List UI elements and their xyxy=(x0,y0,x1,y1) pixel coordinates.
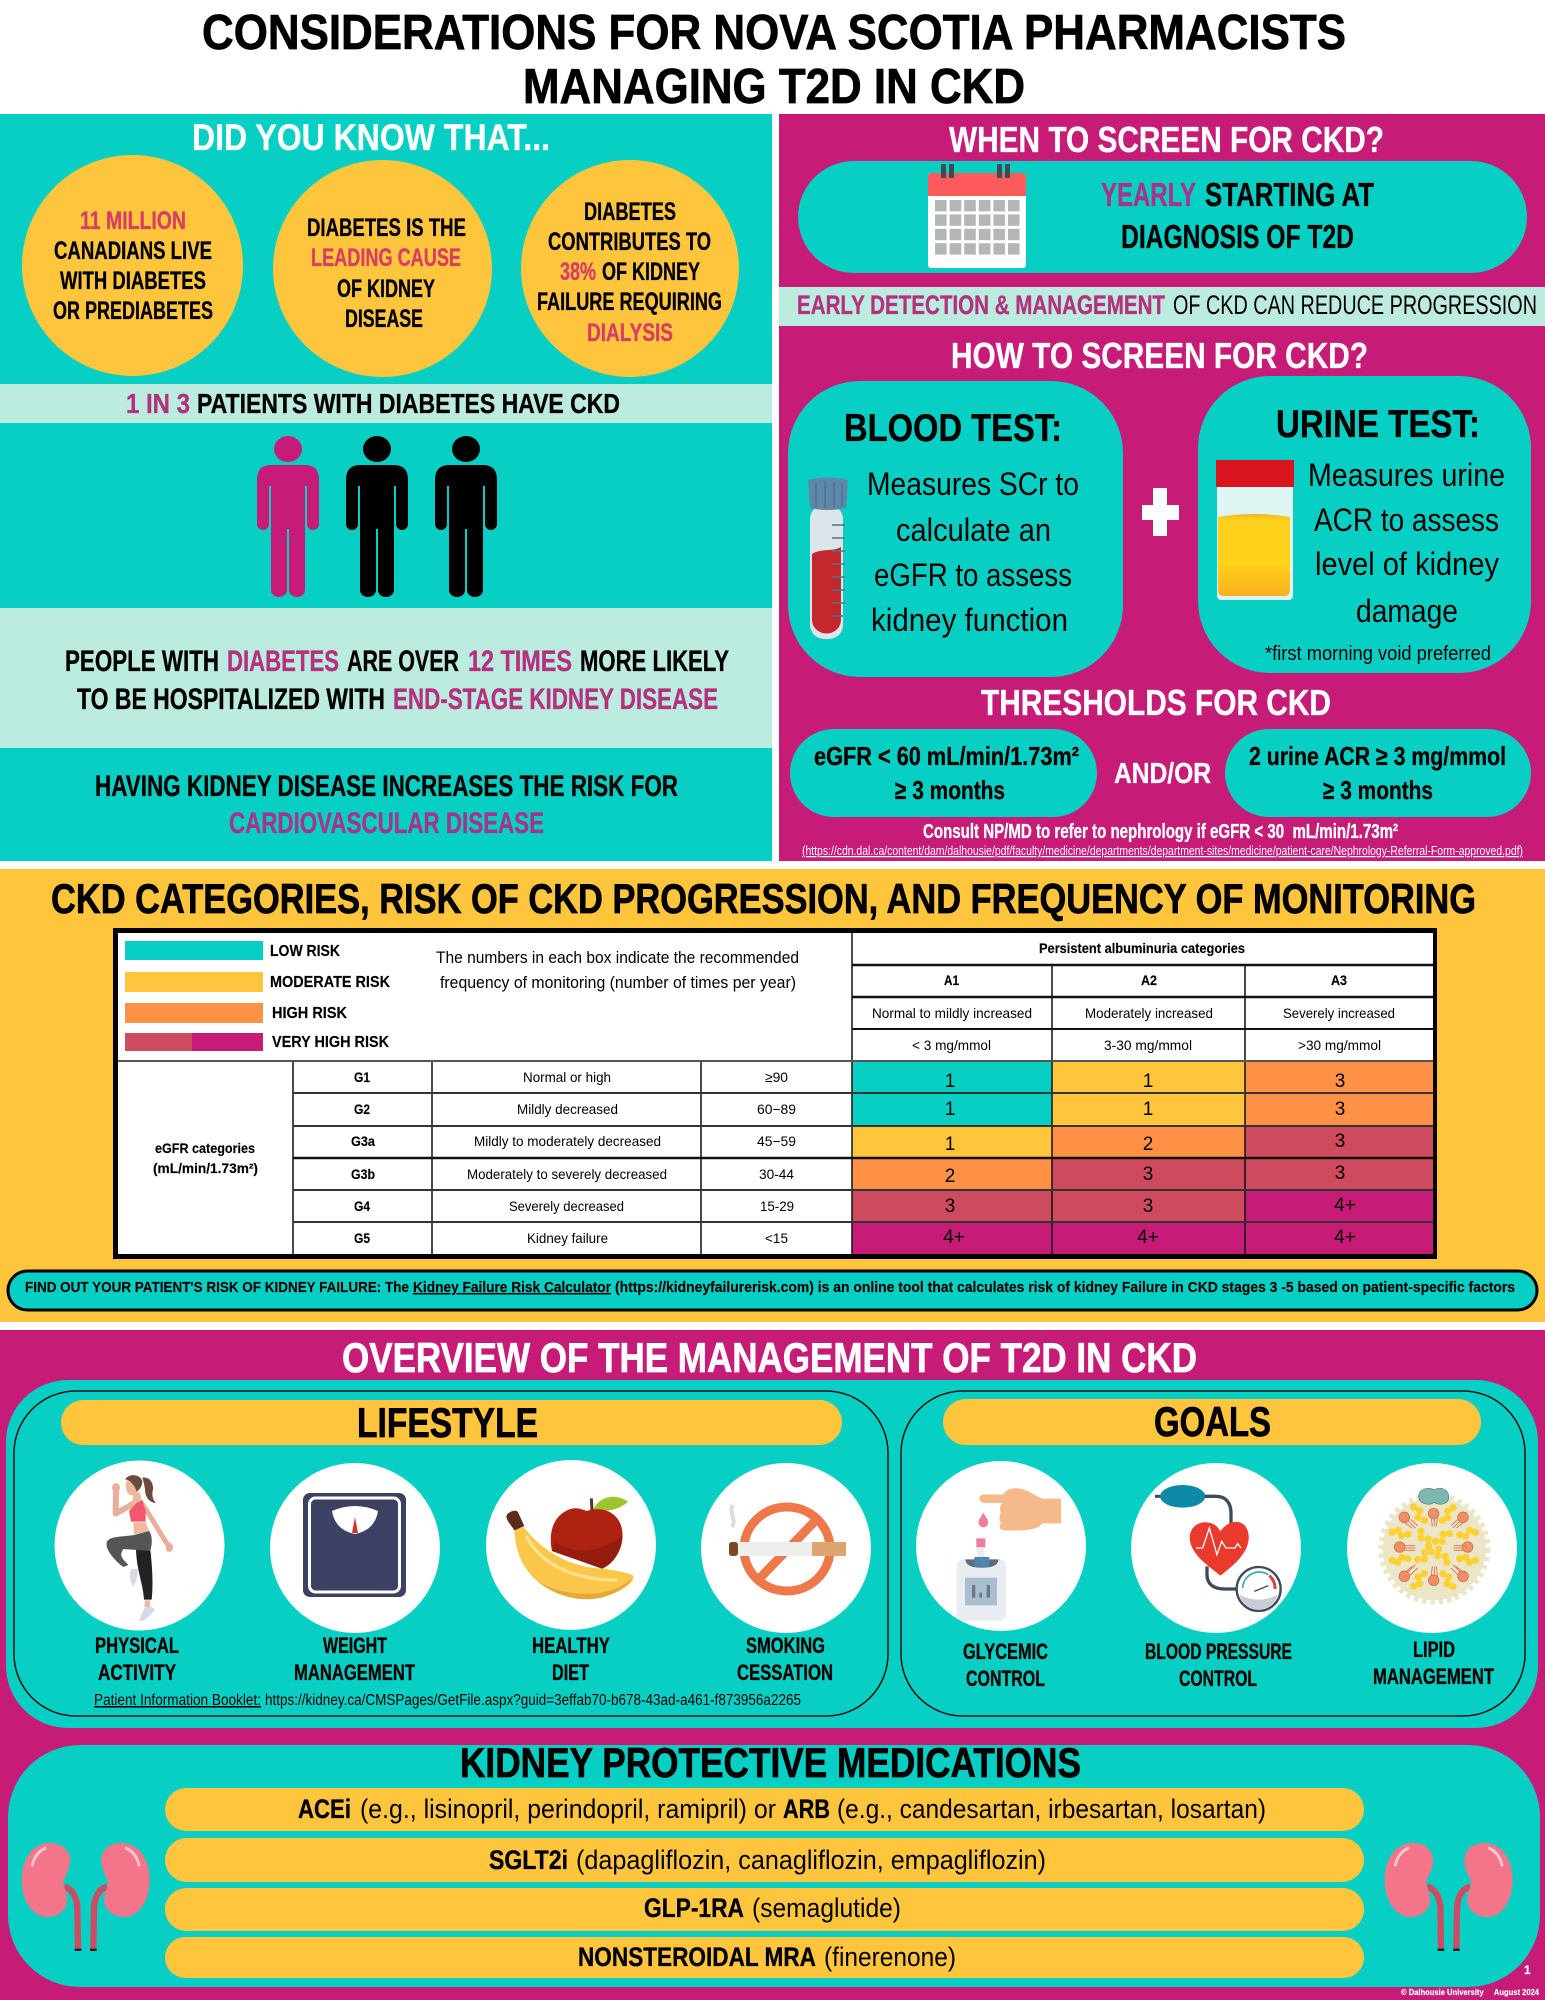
goals labels: BLOOD PRESSURE xyxy=(1145,1639,1292,1664)
icon: black person xyxy=(346,436,408,597)
pill: ACR threshold xyxy=(1225,729,1531,817)
text: cardiovascular risk: CARDIOVASCULAR DISEASE xyxy=(229,807,544,840)
monitoring frequency numbers: 4+ xyxy=(943,1227,965,1248)
fact circle: leading cause: DISEASE xyxy=(345,305,423,333)
eGFR category labels: Kidney failure xyxy=(527,1230,608,1246)
table grid xyxy=(118,933,1433,1254)
pill: eGFR threshold: ≥ 3 months xyxy=(895,775,1005,805)
icon: blood tube xyxy=(808,478,848,639)
eGFR category labels: 15-29 xyxy=(760,1198,794,1214)
card: urine test: URINE TEST: xyxy=(1276,403,1480,446)
lifestyle labels: DIET xyxy=(552,1660,589,1685)
text: cardiovascular risk xyxy=(95,770,678,840)
albuminuria headers: Moderately increased xyxy=(1085,1005,1213,1021)
card: urine test xyxy=(1198,376,1531,673)
monitoring frequency numbers: 3 xyxy=(1335,1163,1345,1184)
fact circle: 11 million: WITH DIABETES xyxy=(60,267,206,295)
band: hospitalization fact: DIABETES xyxy=(227,645,339,678)
text: cardiovascular risk: HAVING KIDNEY DISEASE INCREASES THE RISK FOR xyxy=(95,770,678,803)
band: hospitalization fact xyxy=(0,608,772,748)
callout: kidney failure risk calculator: (https://kidneyfailurerisk.com) is an online tool that calculates risk of kidney Failure in CKD stages 3 -5 based on patient-specific factors xyxy=(615,1280,1515,1296)
pill: ACEi or ARB xyxy=(165,1788,1364,1831)
pill: nonsteroidal MRA: (finerenone) xyxy=(824,1942,956,1972)
band: hospitalization fact: PEOPLE WITH xyxy=(65,645,219,678)
monitoring frequency numbers: 1 xyxy=(1143,1099,1153,1120)
title xyxy=(202,6,1346,114)
fact circle: leading cause xyxy=(273,160,492,377)
lifestyle labels: HEALTHY xyxy=(532,1633,610,1658)
pill: yearly screening: YEARLY xyxy=(1101,176,1196,213)
heading: medications: KIDNEY PROTECTIVE MEDICATIONS xyxy=(460,1739,1081,1786)
goals labels: GLYCEMIC xyxy=(963,1639,1048,1664)
legend: LOW RISK xyxy=(270,943,340,960)
lifestyle labels: PHYSICAL xyxy=(95,1633,179,1658)
legend: VERY HIGH RISK xyxy=(272,1034,389,1051)
pill: GLP-1RA: GLP-1RA xyxy=(644,1893,744,1923)
icon: physical activity xyxy=(54,1460,224,1630)
card: blood test: Measures SCr to xyxy=(867,466,1079,502)
pill: ACEi or ARB: (e.g., candesartan, irbesartan, losartan) xyxy=(837,1794,1266,1824)
band: hospitalization fact: ARE OVER xyxy=(347,645,459,678)
pill: yearly screening xyxy=(798,161,1527,273)
fact circle: 11 million: 11 MILLION xyxy=(80,207,186,235)
icon: smoking cessation xyxy=(701,1463,871,1633)
callout: kidney failure risk calculator xyxy=(8,1271,1537,1310)
goals labels: CONTROL xyxy=(966,1666,1045,1691)
pill: nonsteroidal MRA xyxy=(165,1937,1364,1978)
lifestyle labels: MANAGEMENT xyxy=(294,1660,415,1685)
fact circle: 38 percent xyxy=(521,160,739,377)
fact circle: leading cause: LEADING CAUSE xyxy=(311,244,461,272)
pill: ACEi or ARB: (e.g., lisinopril, perindopril, ramipril) or xyxy=(360,1794,776,1824)
card: urine test: damage xyxy=(1356,593,1458,629)
eGFR category labels: (mL/min/1.73m²) xyxy=(153,1160,258,1176)
band: early detection: EARLY DETECTION & MANAGEMENT xyxy=(797,290,1165,320)
icon: kidneys right xyxy=(1385,1843,1513,1951)
card: blood test: calculate an xyxy=(896,512,1051,548)
eGFR category labels: Moderately to severely decreased xyxy=(467,1166,667,1182)
band: hospitalization fact: MORE LIKELY xyxy=(580,645,729,678)
panel: goals xyxy=(901,1391,1525,1716)
icon: black person xyxy=(435,436,497,597)
pill: GLP-1RA xyxy=(165,1888,1364,1931)
heading: goals xyxy=(943,1398,1481,1445)
eGFR category labels: G3b xyxy=(351,1166,375,1182)
callout: kidney failure risk calculator: Kidney Failure Risk Calculator xyxy=(413,1280,611,1296)
band: hospitalization fact: END-STAGE KIDNEY DISEASE xyxy=(393,683,718,716)
card: urine test: Measures urine xyxy=(1308,457,1505,493)
band: early detection xyxy=(779,287,1545,326)
eGFR category labels: Mildly to moderately decreased xyxy=(474,1133,661,1149)
pill: eGFR threshold: eGFR < 60 mL/min/1.73m² xyxy=(814,741,1079,771)
heading: when to screen: WHEN TO SCREEN FOR CKD? xyxy=(949,119,1384,160)
icon: lipid management xyxy=(1347,1463,1517,1633)
monitoring frequency numbers: 2 xyxy=(1143,1134,1153,1155)
eGFR category labels xyxy=(153,1069,796,1246)
fact circle: leading cause: OF KIDNEY xyxy=(337,275,435,303)
heading: lifestyle xyxy=(61,1399,842,1446)
monitoring frequency numbers: 3 xyxy=(1143,1196,1153,1217)
heading: did you know that: DID YOU KNOW THAT... xyxy=(192,117,550,158)
albuminuria headers: Persistent albuminuria categories xyxy=(1039,940,1245,956)
goals labels: CONTROL xyxy=(1179,1666,1257,1691)
lifestyle labels: ACTIVITY xyxy=(98,1660,176,1685)
icon: pink person xyxy=(257,436,319,597)
albuminuria headers: 3-30 mg/mmol xyxy=(1104,1037,1192,1053)
link: patient information booklet xyxy=(94,1692,801,1709)
monitoring frequency numbers: 1 xyxy=(945,1099,955,1120)
heat map cells xyxy=(852,1061,1433,1254)
band: 1 in 3 xyxy=(0,384,772,423)
eGFR category labels: Mildly decreased xyxy=(517,1101,618,1117)
band: 1 in 3: 1 IN 3 xyxy=(126,388,190,419)
panel: CKD categories xyxy=(0,869,1545,1322)
monitoring frequency numbers: 1 xyxy=(1143,1071,1153,1092)
panel: did you know xyxy=(0,114,772,861)
heading: goals: GOALS xyxy=(1154,1398,1271,1445)
monitoring frequency numbers: 4+ xyxy=(1334,1195,1356,1216)
heading: how to screen: HOW TO SCREEN FOR CKD? xyxy=(951,335,1368,376)
pill: yearly screening: STARTING AT xyxy=(1205,176,1374,213)
label: and/or: AND/OR xyxy=(1114,758,1211,790)
page number: 1 xyxy=(1524,1963,1531,1977)
heading: overview: OVERVIEW OF THE MANAGEMENT OF T2D IN CKD xyxy=(342,1334,1197,1381)
eGFR category labels: 60−89 xyxy=(757,1101,796,1117)
eGFR category labels: G5 xyxy=(354,1230,370,1246)
band: hospitalization fact: TO BE HOSPITALIZED WITH xyxy=(77,683,385,716)
fact circle: leading cause: DIABETES IS THE xyxy=(307,214,466,242)
icon: calendar xyxy=(928,164,1026,268)
band: 1 in 3: PATIENTS WITH DIABETES HAVE CKD xyxy=(197,388,620,419)
link: patient information booklet: Patient Information Booklet: xyxy=(94,1692,261,1709)
goals labels: MANAGEMENT xyxy=(1373,1664,1494,1689)
eGFR category labels: 30-44 xyxy=(759,1166,794,1182)
panel: lifestyle xyxy=(14,1391,888,1716)
goals labels: LIPID xyxy=(1413,1637,1455,1662)
albuminuria headers: < 3 mg/mmol xyxy=(912,1037,991,1053)
monitoring frequency numbers: 3 xyxy=(1335,1099,1345,1120)
fact circle: 38 percent: FAILURE REQUIRING xyxy=(537,288,722,316)
card: blood test xyxy=(788,381,1123,677)
fact circle: 38 percent: OF KIDNEY xyxy=(602,258,700,286)
albuminuria headers xyxy=(872,940,1395,1053)
albuminuria headers: Severely increased xyxy=(1283,1005,1395,1021)
eGFR category labels: G2 xyxy=(354,1101,370,1117)
monitoring frequency numbers: 1 xyxy=(945,1071,955,1092)
pill: eGFR threshold xyxy=(790,729,1097,817)
monitoring frequency numbers: 3 xyxy=(1335,1131,1345,1152)
fact circle: 11 million: CANADIANS LIVE xyxy=(54,237,212,265)
icon: plus xyxy=(1142,488,1179,536)
eGFR category labels: G1 xyxy=(354,1069,370,1085)
pill: ACEi or ARB: ACEi xyxy=(298,1794,351,1824)
lifestyle labels: SMOKING xyxy=(746,1633,825,1658)
pill: SGLT2i xyxy=(165,1838,1364,1882)
fact circle: 38 percent: 38% xyxy=(560,258,596,286)
link: patient information booklet: https://kidney.ca/CMSPages/GetFile.aspx?guid=3effab70-b678-43ad-a461-f873956a2265 xyxy=(265,1692,801,1709)
lifestyle labels xyxy=(95,1633,833,1685)
monitoring frequency numbers: 3 xyxy=(1335,1071,1345,1092)
pill: yearly screening: DIAGNOSIS OF T2D xyxy=(1121,218,1354,255)
card: blood test: eGFR to assess xyxy=(874,557,1072,593)
albuminuria headers: A2 xyxy=(1141,972,1157,988)
icon: urine cup xyxy=(1216,460,1294,600)
legend: MODERATE RISK xyxy=(270,974,390,991)
eGFR category labels: 45−59 xyxy=(757,1133,796,1149)
pill: SGLT2i: (dapagliflozin, canagliflozin, empagliflozin) xyxy=(576,1845,1046,1875)
card: urine test: level of kidney xyxy=(1315,546,1499,582)
eGFR category labels: Normal or high xyxy=(523,1069,611,1085)
icon: blood pressure control xyxy=(1131,1463,1301,1633)
pill: GLP-1RA: (semaglutide) xyxy=(752,1893,901,1923)
note: monitoring frequency: The numbers in each box indicate the recommended xyxy=(436,949,799,967)
eGFR category labels: ≥90 xyxy=(765,1069,788,1085)
eGFR category labels: <15 xyxy=(765,1230,788,1246)
text: consult note: Consult NP/MD to refer to nephrology if eGFR < 30 mL/min/1.73m² xyxy=(923,821,1398,843)
monitoring frequency numbers: 3 xyxy=(945,1196,955,1217)
title: CONSIDERATIONS FOR NOVA SCOTIA PHARMACISTS xyxy=(202,6,1346,60)
fact circle: 11 million xyxy=(22,155,243,376)
eGFR category labels: G3a xyxy=(351,1133,375,1149)
pill: ACR threshold: ≥ 3 months xyxy=(1323,775,1433,805)
card: urine test: ACR to assess xyxy=(1314,502,1499,538)
lifestyle labels: WEIGHT xyxy=(323,1633,387,1658)
table: risk heat map xyxy=(113,928,1437,1259)
monitoring frequency numbers: 4+ xyxy=(1137,1227,1159,1248)
band: hospitalization fact: 12 TIMES xyxy=(468,645,572,678)
eGFR category labels: eGFR categories xyxy=(155,1140,255,1156)
albuminuria headers: A1 xyxy=(944,972,959,988)
note: monitoring frequency: frequency of monitoring (number of times per year) xyxy=(440,974,796,992)
albuminuria headers: A3 xyxy=(1331,972,1347,988)
fact circle: 38 percent: CONTRIBUTES TO xyxy=(548,228,711,256)
monitoring frequency numbers: 3 xyxy=(1143,1164,1153,1185)
monitoring frequency numbers xyxy=(943,1071,1356,1248)
note: monitoring frequency xyxy=(436,949,799,992)
eGFR category labels: G4 xyxy=(354,1198,370,1214)
icon: glycemic control xyxy=(916,1461,1086,1631)
monitoring frequency numbers: 4+ xyxy=(1334,1227,1356,1248)
teal background panel xyxy=(6,1380,1538,1728)
card: blood test: BLOOD TEST: xyxy=(844,407,1062,450)
panel: screening xyxy=(779,114,1545,861)
fact circle: 11 million: OR PREDIABETES xyxy=(53,297,213,325)
callout: kidney failure risk calculator: FIND OUT YOUR PATIENT'S RISK OF KIDNEY FAILURE: The xyxy=(25,1280,409,1296)
monitoring frequency numbers: 2 xyxy=(945,1166,955,1187)
albuminuria headers: Normal to mildly increased xyxy=(872,1005,1032,1021)
monitoring frequency numbers: 1 xyxy=(945,1134,955,1155)
fact circle: 38 percent: DIABETES xyxy=(584,198,676,226)
heading: thresholds: THRESHOLDS FOR CKD xyxy=(981,682,1331,723)
icon: healthy diet xyxy=(486,1460,656,1630)
fact circle: 38 percent: DIALYSIS xyxy=(587,319,673,347)
heading: lifestyle: LIFESTYLE xyxy=(357,1399,538,1446)
pill: nonsteroidal MRA: NONSTEROIDAL MRA xyxy=(578,1942,816,1972)
icon: weight scale xyxy=(270,1463,440,1633)
card: urine test: *first morning void preferred xyxy=(1265,643,1491,665)
panel: management overview xyxy=(0,1330,1545,2000)
icon: kidneys left xyxy=(22,1843,150,1951)
lifestyle labels: CESSATION xyxy=(737,1660,833,1685)
albuminuria headers: >30 mg/mmol xyxy=(1298,1037,1381,1053)
pill: SGLT2i: SGLT2i xyxy=(489,1845,568,1875)
legend: HIGH RISK xyxy=(272,1005,347,1022)
panel: kidney protective medications xyxy=(8,1739,1540,1987)
pill: ACEi or ARB: ARB xyxy=(783,1794,830,1824)
title: MANAGING T2D IN CKD xyxy=(523,60,1025,114)
legend xyxy=(125,941,390,1051)
goals labels xyxy=(963,1637,1494,1691)
eGFR category labels: Severely decreased xyxy=(509,1198,624,1214)
card: blood test: kidney function xyxy=(871,602,1068,638)
